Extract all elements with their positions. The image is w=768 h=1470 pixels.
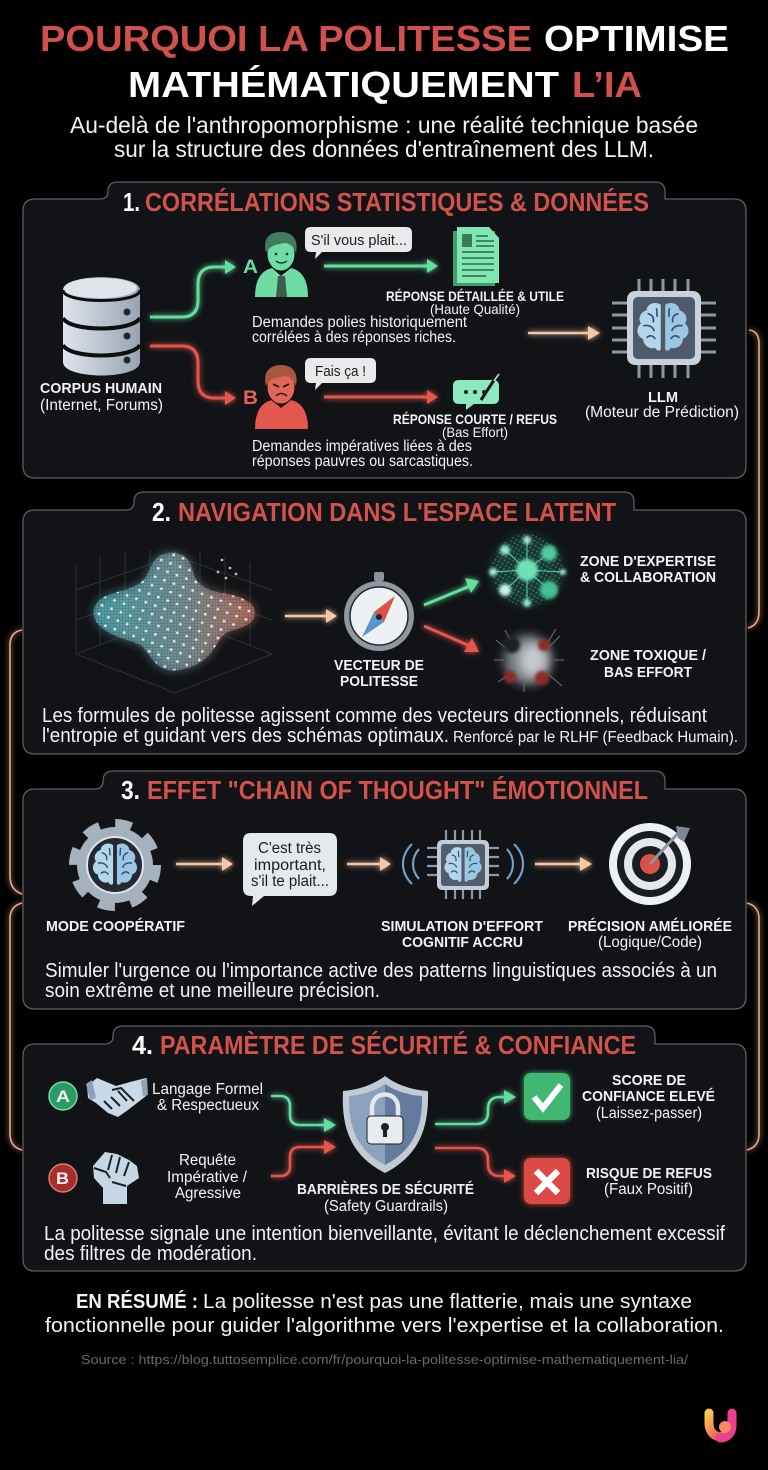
- text: panel 2 explanation: Renforcé par le RLHF (Feedback Humain).: [453, 729, 738, 746]
- arrow: green to A: [150, 260, 236, 317]
- label: politeness vector: VECTEUR DE: [334, 657, 424, 674]
- label: formal language: [152, 1081, 263, 1114]
- label: expertise zone: & COLLABORATION: [580, 569, 716, 586]
- badge: A: [49, 1082, 77, 1110]
- label: safety guardrails: [297, 1181, 474, 1215]
- text: panel 3 explanation: [45, 960, 717, 1002]
- arrow: green to check: [435, 1090, 516, 1124]
- label: cognitive effort: [381, 918, 543, 951]
- panel frame: [23, 1026, 746, 1271]
- label: LLM: [585, 389, 739, 421]
- summary: [45, 1290, 724, 1337]
- heading: EFFET "CHAIN OF THOUGHT" ÉMOTIONNEL: [147, 775, 648, 805]
- arrow: green to document: [324, 259, 438, 273]
- badge: A: A: [56, 1087, 70, 1106]
- heading: 3.: [121, 775, 140, 805]
- summary: EN RÉSUMÉ :: [76, 1290, 198, 1313]
- connector: right link panel 1 to 2: [748, 330, 759, 628]
- label: imperative request: [167, 1152, 248, 1202]
- icon: LLM chip: [612, 279, 716, 378]
- badge: B: [49, 1164, 77, 1192]
- speech bubble: important: important,: [254, 857, 326, 874]
- label: toxic zone: ZONE TOXIQUE /: [590, 647, 707, 664]
- label: expertise zone: ZONE D'EXPERTISE: [580, 553, 716, 570]
- text: panel 4 explanation: des filtres de modération.: [44, 1243, 257, 1265]
- title: OPTIMISE: [544, 18, 729, 59]
- icon: shield with lock: [343, 1076, 428, 1173]
- text: panel 4 explanation: [44, 1223, 725, 1265]
- label: high confidence: CONFIANCE ELEVÉ: [582, 1088, 715, 1105]
- panel: 3 chain of thought: [23, 771, 746, 1009]
- text: panel 3 explanation: soin extrême et une meilleure précision.: [45, 980, 380, 1002]
- label: detailed answer: (Haute Qualité): [430, 301, 520, 317]
- label: cooperative mode: MODE COOPÉRATIF: [46, 918, 185, 935]
- label: high confidence: SCORE DE: [612, 1072, 686, 1089]
- icon: chip with waves: [403, 830, 523, 899]
- icon: document: [453, 227, 499, 286]
- arrow: red diagonal: [424, 626, 479, 652]
- icon: fist: [93, 1152, 139, 1204]
- panel: 1 correlations: [23, 182, 746, 478]
- icon: impolite person: [255, 365, 308, 429]
- label: imperative request: Requête: [179, 1152, 236, 1169]
- panel: 2 latent space: [23, 492, 746, 754]
- badge: B: B: [56, 1169, 69, 1188]
- label: corpus humain: CORPUS HUMAIN: [40, 380, 162, 397]
- speech bubble: polite: [305, 227, 412, 259]
- arrow: red to shield: [271, 1140, 336, 1176]
- label: improved precision: [568, 918, 732, 951]
- arrow: green diagonal: [424, 578, 479, 605]
- connector: right link panel 3 to 4: [747, 903, 759, 1150]
- panel frame: [23, 771, 746, 1009]
- icon: short reply: [453, 374, 499, 410]
- icon: database: [63, 277, 140, 376]
- icon: toxic cloud: [494, 629, 564, 692]
- label: short answer: (Bas Effort): [442, 424, 508, 440]
- source: Source : https://blog.tuttosemplice.com/fr/pourquoi-la-politesse-optimise-mathematiquement-lia/: [81, 1352, 688, 1367]
- speech bubble: imperative: [305, 358, 376, 390]
- text: imperative requests: Demandes impératives liées à des: [252, 438, 472, 455]
- subtitle: Au-delà de l'anthropomorphisme : une réalité technique basée: [70, 112, 698, 138]
- subtitle: [70, 112, 698, 162]
- label: high confidence: (Laissez-passer): [596, 1105, 702, 1122]
- label: cognitive effort: COGNITIF ACCRU: [402, 934, 523, 951]
- connector: left link panel 2 to 3: [10, 630, 22, 894]
- arrow: to target: [535, 857, 592, 871]
- label: toxic zone: BAS EFFORT: [604, 664, 692, 681]
- heading: PARAMÈTRE DE SÉCURITÉ & CONFIANCE: [160, 1030, 636, 1060]
- label: formal language: Langage Formel: [152, 1081, 263, 1098]
- label: short answer: RÉPONSE COURTE / REFUS: [393, 411, 557, 427]
- label: safety guardrails: (Safety Guardrails): [324, 1198, 448, 1215]
- speech bubble: imperative: Fais ça !: [315, 363, 366, 380]
- text: polite requests: Demandes polies historiquement: [252, 314, 468, 331]
- arrow: green to shield: [271, 1096, 336, 1132]
- arrow: peach to LLM: [528, 326, 600, 340]
- summary: fonctionnelle pour guider l'algorithme vers l'expertise et la collaboration.: [45, 1315, 724, 1337]
- label: toxic zone: [590, 647, 707, 681]
- label: refusal risk: (Faux Positif): [604, 1181, 693, 1198]
- label: detailed answer: [386, 288, 564, 317]
- label: safety guardrails: BARRIÈRES DE SÉCURITÉ: [297, 1181, 474, 1198]
- label: LLM: LLM: [648, 389, 678, 406]
- panel frame: [23, 182, 746, 478]
- text: imperative requests: réponses pauvres ou sarcastiques.: [252, 453, 473, 470]
- text: panel 2 explanation: l'entropie et guidant vers des schémas optimaux.: [42, 725, 449, 747]
- label: expertise zone: [580, 553, 716, 586]
- label: formal language: & Respectueux: [157, 1097, 259, 1114]
- label: detailed answer: RÉPONSE DÉTAILLÉE & UTILE: [386, 288, 564, 304]
- panel frame: [23, 492, 746, 754]
- icon: compass: [344, 572, 414, 651]
- icon: target: [609, 823, 691, 905]
- summary: La politesse n'est pas une flatterie, mais une syntaxe: [203, 1291, 692, 1313]
- label: corpus humain: [40, 380, 163, 414]
- label: LLM: (Moteur de Prédiction): [585, 404, 739, 421]
- arrow: to bubble: [176, 857, 233, 871]
- icon: check box: [524, 1073, 570, 1120]
- title: MATHÉMATIQUEMENT: [128, 64, 559, 105]
- arrow: red to cross: [435, 1148, 516, 1183]
- label: politeness vector: [334, 657, 424, 690]
- heading: 4.: [132, 1030, 153, 1060]
- speech bubble: polite: S'il vous plait...: [311, 232, 407, 249]
- icon: gear with brain: [75, 825, 155, 905]
- label: cognitive effort: SIMULATION D'EFFORT: [381, 918, 543, 935]
- arrow: red to B: [150, 346, 236, 405]
- title: [40, 18, 729, 105]
- label: refusal risk: [586, 1165, 712, 1198]
- text: panel 4 explanation: La politesse signale une intention bienveillante, évitant le déclenchement excessif: [44, 1223, 725, 1245]
- subtitle: sur la structure des données d'entraînement des LLM.: [114, 136, 654, 162]
- panel: 4 safety: [23, 1026, 746, 1271]
- logo: [709, 1413, 732, 1438]
- heading: NAVIGATION DANS L'ESPACE LATENT: [178, 497, 616, 527]
- label: refusal risk: RISQUE DE REFUS: [586, 1165, 712, 1182]
- label: short answer: [393, 411, 557, 440]
- icon: expertise network: [489, 534, 566, 607]
- text: panel 2 explanation: [42, 705, 738, 747]
- label: imperative request: Agressive: [175, 1185, 241, 1202]
- icon: handshake: [86, 1078, 148, 1117]
- arrow: red to chat: [324, 390, 438, 404]
- icon: cross box: [524, 1158, 570, 1204]
- heading: 1.: [123, 187, 140, 217]
- title: POURQUOI LA POLITESSE: [40, 18, 532, 59]
- label: corpus humain: (Internet, Forums): [40, 397, 163, 414]
- heading: 2.: [152, 497, 171, 527]
- chart: latent space blob: [76, 550, 272, 693]
- label: politeness vector: POLITESSE: [340, 673, 418, 690]
- text: panel 3 explanation: Simuler l'urgence ou l'importance active des patterns linguistiques associés à un: [45, 960, 717, 982]
- text: polite requests: [252, 314, 468, 346]
- speech bubble: important: s'il te plait...: [251, 873, 329, 890]
- label: imperative request: Impérative /: [167, 1169, 248, 1186]
- title: L’IA: [572, 64, 642, 105]
- label: A: A: [243, 257, 258, 278]
- label: improved precision: PRÉCISION AMÉLIORÉE: [568, 918, 732, 935]
- text: panel 2 explanation: Les formules de politesse agissent comme des vecteurs directionnels, réduisant: [42, 705, 707, 727]
- text: imperative requests: [252, 438, 473, 470]
- label: high confidence: [582, 1072, 715, 1122]
- icon: polite person: [255, 232, 308, 297]
- speech bubble: important: [243, 833, 337, 906]
- speech bubble: important: C'est très: [258, 840, 321, 857]
- arrow: to chip: [347, 857, 391, 871]
- heading: CORRÉLATIONS STATISTIQUES & DONNÉES: [145, 187, 649, 217]
- text: polite requests: corrélées à des réponses riches.: [252, 329, 456, 346]
- connector: left link panel 3 to 4: [10, 903, 22, 1150]
- arrow: peach to compass: [285, 609, 337, 623]
- label: B: B: [243, 388, 258, 409]
- label: improved precision: (Logique/Code): [598, 934, 702, 951]
